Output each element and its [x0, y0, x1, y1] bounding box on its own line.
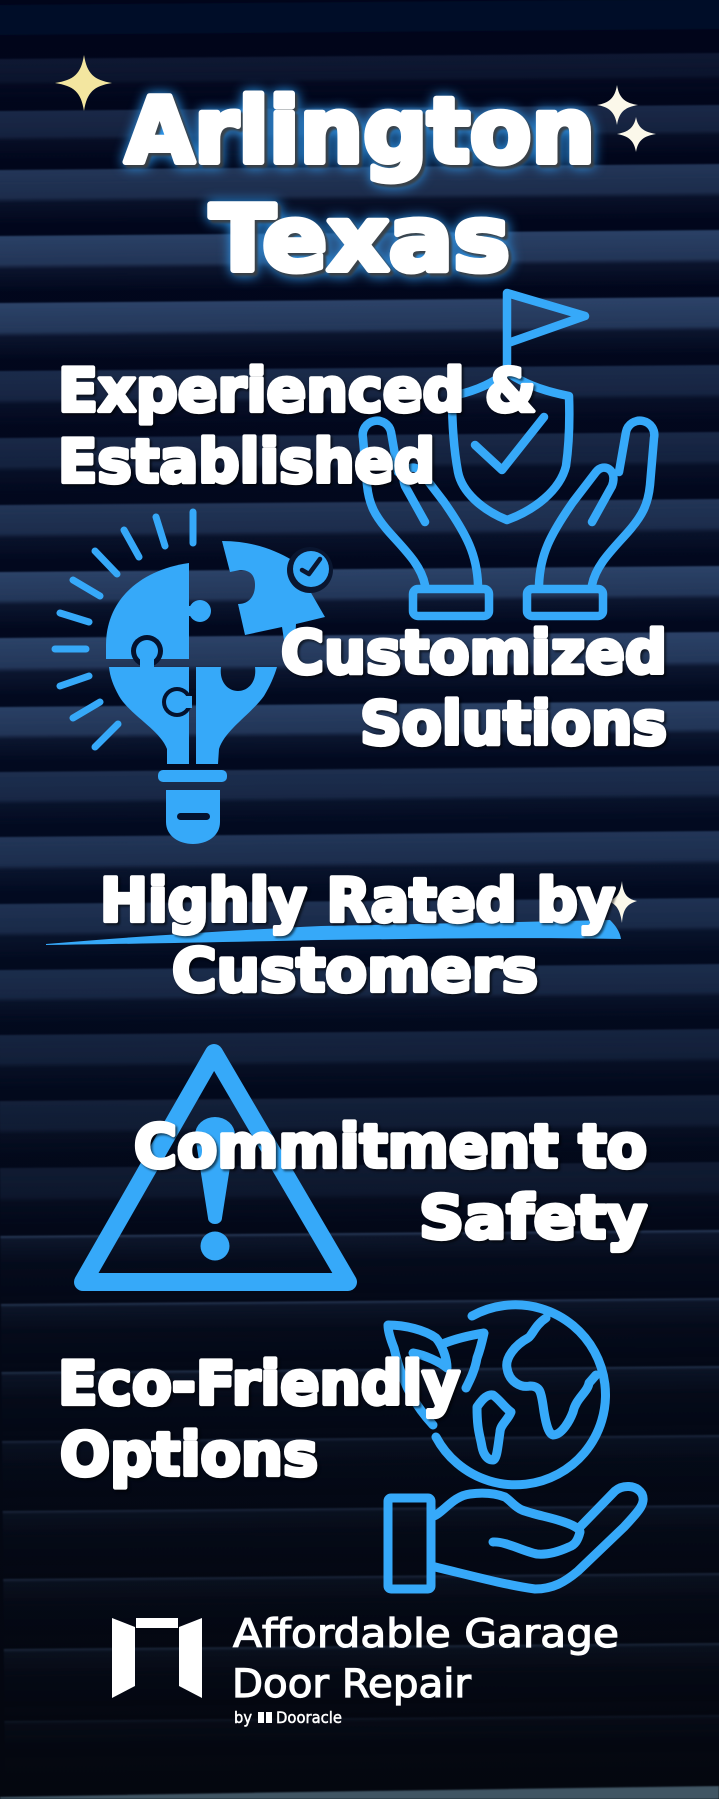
logo: wordmark: Door Repair [232, 1662, 472, 1707]
bulb puzzle pieces [106, 541, 325, 844]
icon: white sparkles [597, 85, 656, 152]
logo: door mark [112, 1618, 202, 1698]
icon: warning triangle [83, 1053, 348, 1282]
title [125, 79, 595, 292]
icon: hands holding shield and flag [363, 293, 654, 616]
heading: highly rated by customers: Highly Rated by [100, 866, 615, 936]
heading: commitment to safety [134, 1112, 647, 1253]
heading: customized solutions: Customized [281, 618, 667, 688]
icon: small sparkle [608, 881, 637, 923]
title: Texas [210, 187, 510, 292]
puzzle notches [131, 635, 163, 667]
icon: hand holding globe with leaves [388, 1305, 643, 1589]
bulb rays [55, 512, 193, 747]
heading: eco-friendly options [58, 1349, 460, 1490]
logo: wordmark: by [234, 1708, 252, 1727]
logo: wordmark [232, 1612, 619, 1727]
title: Arlington [125, 79, 595, 184]
logo: wordmark: Affordable Garage [233, 1612, 619, 1657]
heading: eco-friendly options: Eco-Friendly [58, 1349, 460, 1419]
heading: experienced and established [58, 356, 536, 497]
heading: highly rated by customers [100, 866, 615, 1006]
heading: experienced and established: Established [58, 427, 435, 497]
heading: experienced and established: Experienced & [58, 356, 536, 426]
heading: commitment to safety: Safety [419, 1183, 647, 1253]
heading: customized solutions: Solutions [360, 689, 667, 759]
icon: puzzle light bulb [55, 512, 333, 844]
icon: gold sparkle [55, 55, 112, 111]
heading: customized solutions [281, 618, 667, 759]
logo: wordmark: Dooracle [276, 1708, 342, 1727]
heading: commitment to safety: Commitment to [134, 1112, 647, 1182]
underline swoosh [46, 920, 621, 945]
heading: highly rated by customers: Customers [172, 936, 538, 1006]
check badge [287, 547, 333, 593]
heading: eco-friendly options: Options [60, 1420, 318, 1490]
